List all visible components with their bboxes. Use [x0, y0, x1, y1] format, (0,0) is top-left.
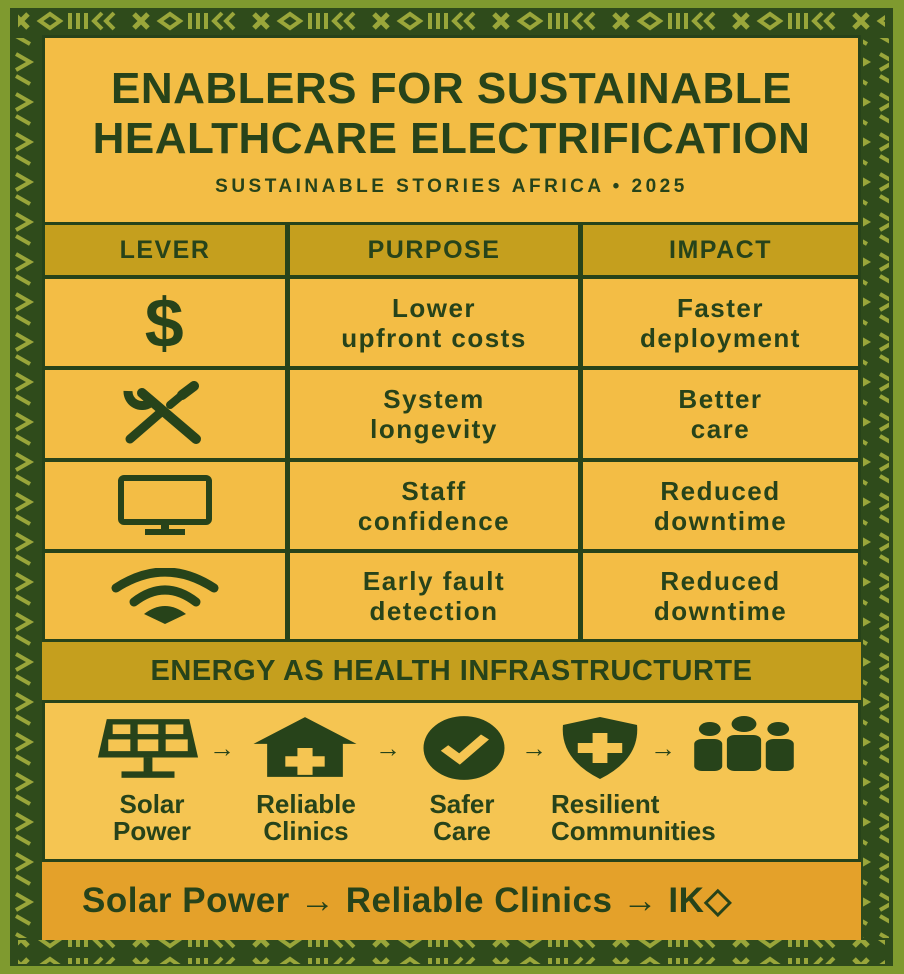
icon: check circle [424, 716, 504, 780]
row 1 icon: dollar [45, 279, 285, 366]
banner: energy as health infrastructure [42, 642, 861, 703]
label: safer care: Safer [429, 789, 495, 819]
footer bar: Solar Power → Reliable Clinics → IK◇ [82, 881, 732, 920]
label: resilient communities: Resilient [551, 789, 659, 819]
title [93, 64, 810, 163]
row 4 impact [583, 553, 858, 639]
table: PURPOSE [368, 236, 500, 264]
row 3 impact [583, 462, 858, 549]
label: safer care [429, 789, 495, 846]
arrow: → [521, 733, 547, 763]
label: safer care: Care [433, 816, 491, 846]
arrow: → [650, 733, 676, 763]
footer bar [42, 859, 861, 940]
banner: energy as health infrastructure: ENERGY AS HEALTH INFRASTRUCTURTE [151, 654, 752, 686]
row 4 purpose [290, 553, 578, 639]
row 4 purpose: Early fault [363, 566, 505, 596]
row 3 impact: Reduced [660, 476, 781, 506]
icon: solar panel [98, 719, 198, 778]
table header [45, 225, 285, 275]
label: solar power [113, 789, 191, 846]
icon: clinic house [254, 717, 356, 777]
row 2 impact: care [691, 414, 750, 444]
row 1 icon: dollar: $ [145, 284, 185, 362]
label: solar power: Solar [119, 789, 185, 819]
row 1 impact: deployment [640, 322, 801, 352]
label: reliable clinics: Reliable [256, 789, 356, 819]
row 3 icon: monitor [45, 462, 285, 549]
row 2 impact [583, 370, 858, 458]
title: ENABLERS FOR SUSTAINABLE [111, 64, 792, 113]
row 1 purpose: Lower [392, 292, 476, 322]
label: reliable clinics: Clinics [263, 816, 349, 846]
row 1 impact: Faster [677, 292, 764, 322]
arrow: → [375, 733, 401, 763]
row 3 purpose [290, 462, 578, 549]
table header: LEVER [120, 236, 210, 264]
title: HEALTHCARE ELECTRIFICATION [93, 114, 810, 163]
label: resilient communities [551, 789, 716, 846]
row 2 purpose [290, 370, 578, 458]
row 3 purpose: confidence [358, 506, 510, 536]
row 4 purpose: detection [369, 596, 499, 626]
subtitle: SUSTAINABLE STORIES AFRICA • 2025 [215, 176, 688, 197]
row 4 impact: Reduced [660, 566, 781, 596]
arrow: → [209, 733, 235, 763]
label: reliable clinics [256, 789, 356, 846]
row 4 icon: wifi [45, 553, 285, 639]
icon: people [694, 716, 794, 771]
label: solar power: Power [113, 816, 191, 846]
row 1 impact [583, 279, 858, 366]
row 4 impact: downtime [654, 596, 787, 626]
icon: shield [562, 717, 638, 779]
row 3 purpose: Staff [401, 476, 467, 506]
flow section [45, 703, 858, 859]
row 2 purpose: longevity [370, 414, 498, 444]
row 1 purpose: upfront costs [341, 322, 527, 352]
row 1 purpose [290, 279, 578, 366]
row 3 impact: downtime [654, 506, 787, 536]
row 2 purpose: System [383, 384, 485, 414]
row 2 impact: Better [678, 384, 763, 414]
table [42, 222, 861, 642]
table: IMPACT [669, 236, 772, 264]
label: resilient communities: Communities [551, 816, 716, 846]
row 2 icon: tools [45, 370, 285, 458]
